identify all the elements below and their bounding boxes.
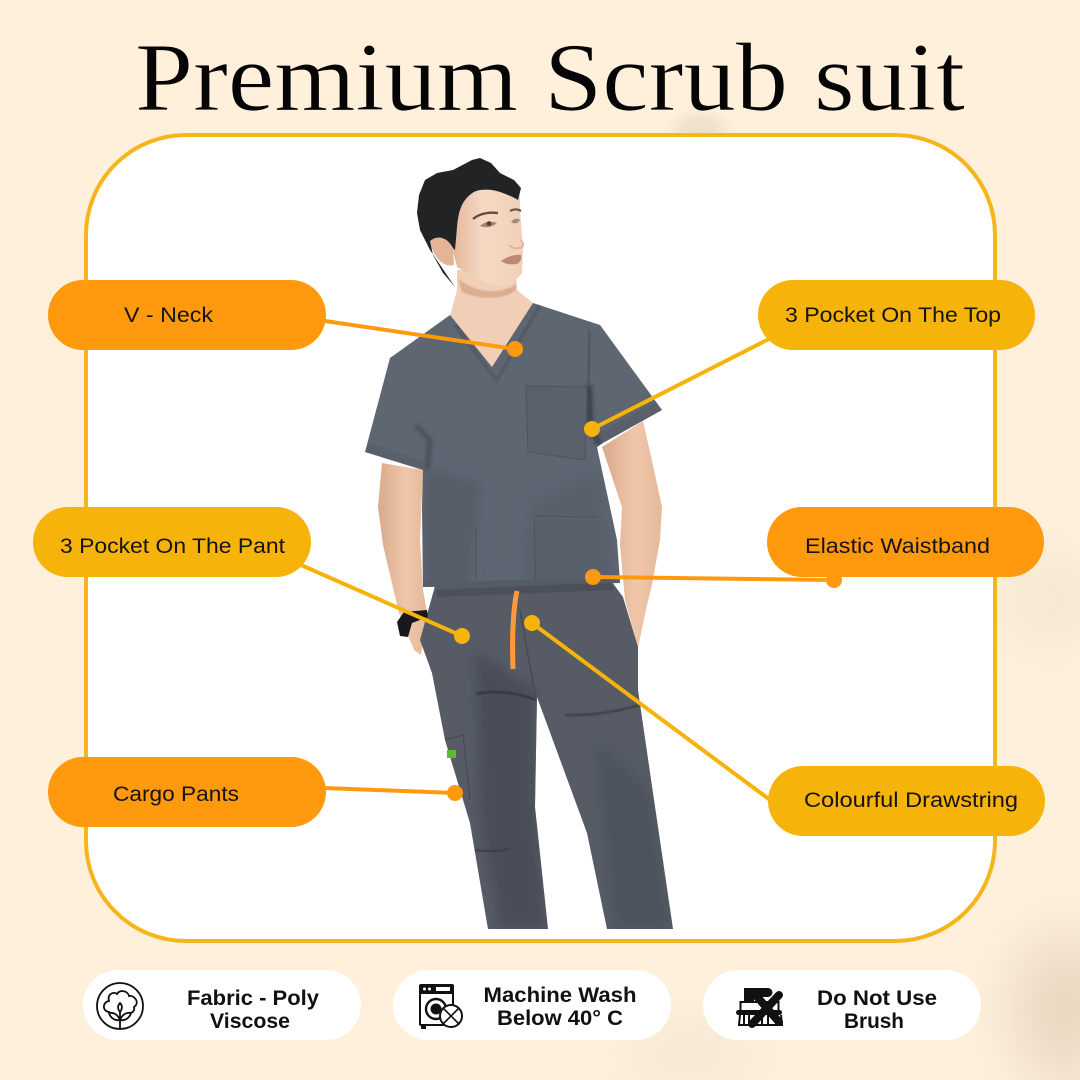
title: Premium Scrub suit [135, 24, 965, 132]
care badge: machine wash: Below 40° C [497, 1006, 623, 1030]
care badge: machine wash [393, 970, 671, 1040]
icon: crossed-out brush [736, 988, 782, 1025]
icon: washing machine with cross [419, 984, 462, 1029]
callout: 3 Pocket On The Pant: 3 Pocket On The Pant [60, 534, 285, 558]
callout: 3 Pocket On The Top [584, 280, 1035, 437]
shirt shading [365, 305, 662, 590]
ear [430, 237, 454, 266]
wristwatch [397, 610, 428, 637]
pant shading [436, 582, 670, 929]
callout: Cargo Pants: Cargo Pants [113, 782, 239, 806]
pants [420, 582, 673, 929]
care badge: fabric: Viscose [210, 1009, 290, 1033]
white product panel [86, 135, 995, 941]
model wearing scrub suit [365, 158, 673, 929]
callout: Colourful Drawstring: Colourful Drawstring [804, 788, 1018, 812]
shirt [365, 303, 662, 587]
callout: V - Neck [48, 280, 523, 357]
care badge: no brush: Brush [844, 1009, 904, 1033]
face [450, 178, 523, 287]
neck [450, 270, 534, 368]
left arm [378, 463, 427, 655]
text: no brush: Do Not Use [817, 986, 937, 1010]
green pant tag [447, 750, 456, 758]
callout: 3 Pocket On The Top: 3 Pocket On The Top [785, 303, 1001, 327]
callout: Elastic Waistband [585, 507, 1044, 588]
callout: Cargo Pants [48, 757, 463, 827]
nose [509, 240, 523, 248]
care badge: fabric [83, 970, 361, 1040]
care badge: no brush [703, 970, 981, 1040]
text: machine wash: Machine Wash [484, 983, 636, 1007]
orange drawstring [513, 591, 517, 669]
callout: 3 Pocket On The Pant [33, 507, 470, 644]
lips [501, 255, 521, 264]
text: fabric: Fabric - Poly [187, 986, 319, 1010]
hair [417, 158, 521, 287]
icon: cotton plant [97, 983, 143, 1029]
eyes and brows [473, 210, 523, 264]
callout: Elastic Waistband: Elastic Waistband [805, 534, 990, 558]
callout: V - Neck: V - Neck [124, 303, 213, 327]
callout: Colourful Drawstring [524, 615, 1045, 836]
right arm [602, 421, 662, 648]
